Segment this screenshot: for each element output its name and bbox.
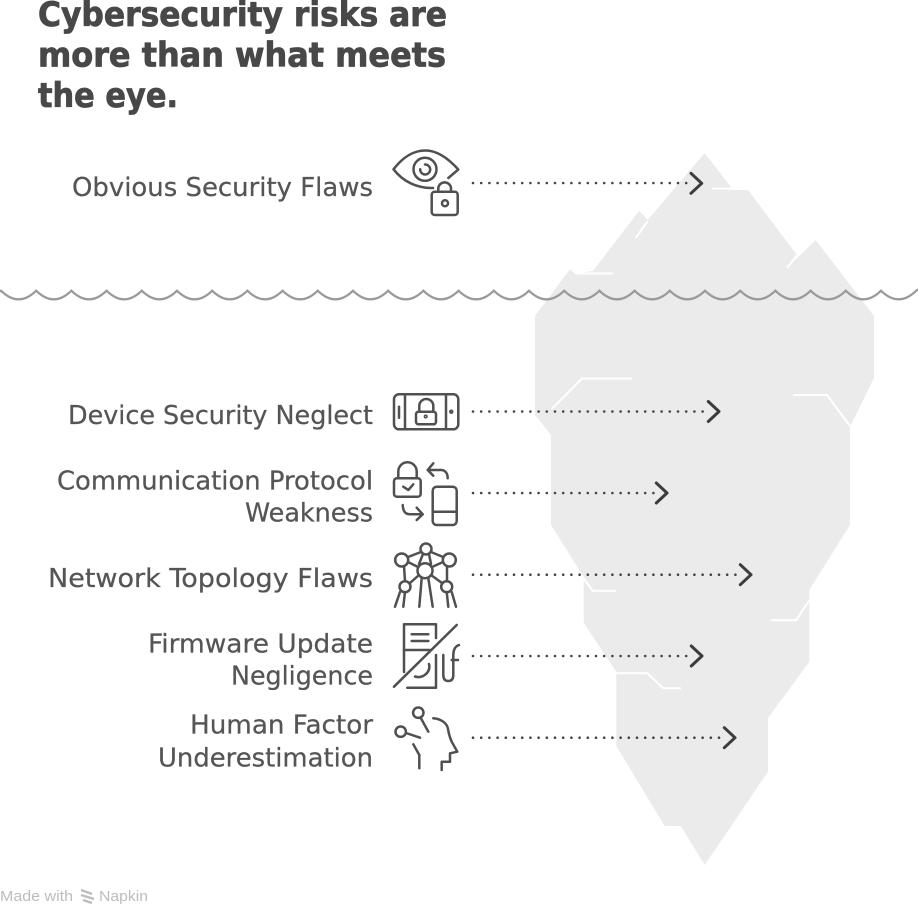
row: Obvious Security Flaws — [72, 150, 702, 215]
icon: crossed-out firmware device — [394, 624, 459, 688]
label: Obvious Security Flaws — [72, 173, 373, 203]
label — [148, 630, 373, 692]
icon: eye and lock — [394, 150, 458, 215]
label: Network Topology Flaws — [48, 564, 373, 594]
label: Negligence — [231, 662, 373, 692]
footer: Made with Napkin: Napkin — [99, 889, 148, 905]
row: Network Topology Flaws — [48, 544, 751, 607]
row: Communication Protocol Weakness — [57, 462, 667, 528]
water line — [0, 287, 918, 299]
iceberg — [535, 153, 874, 865]
label: Underestimation — [158, 744, 373, 774]
icon: head with nodes — [396, 708, 457, 770]
label — [57, 466, 373, 528]
label — [158, 710, 373, 774]
footer: Made with Napkin: Made with — [0, 889, 73, 905]
arrow — [473, 646, 702, 666]
row: Human Factor Underestimation — [158, 708, 735, 774]
icon: network nodes — [395, 544, 456, 607]
icon: lock, phone and exchange arrows — [394, 462, 457, 525]
label: Weakness — [245, 498, 373, 528]
arrow — [473, 565, 751, 585]
label: Device Security Neglect — [68, 401, 373, 431]
arrow — [473, 728, 735, 748]
title — [38, 0, 447, 116]
label: Communication Protocol — [57, 466, 373, 496]
arrow — [473, 402, 719, 422]
title: more than what meets — [38, 36, 446, 76]
arrow — [473, 483, 667, 503]
row: Device Security Neglect — [68, 394, 719, 431]
arrow — [473, 173, 702, 193]
label: Human Factor — [190, 710, 373, 740]
footer: Made with Napkin — [0, 889, 148, 905]
label: Firmware Update — [148, 630, 373, 660]
icon: phone with lock — [394, 394, 458, 429]
row: Firmware Update Negligence — [148, 624, 702, 692]
title: the eye. — [38, 76, 178, 116]
